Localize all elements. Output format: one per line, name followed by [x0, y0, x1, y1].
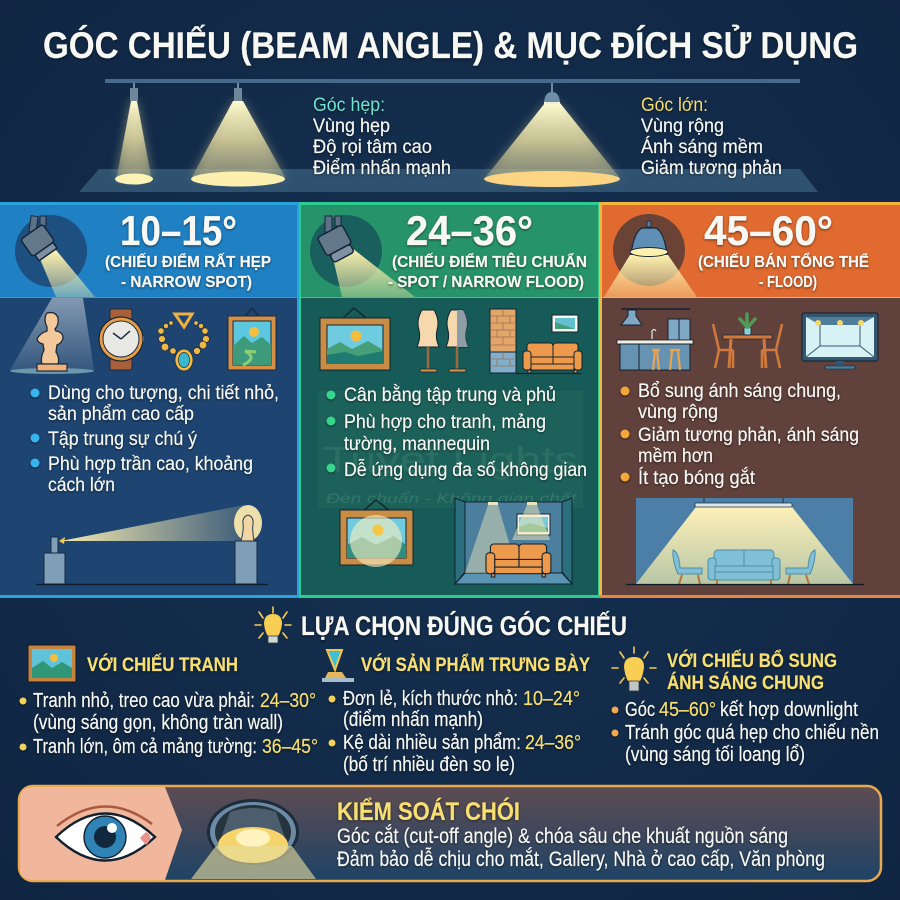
icon: display monitor — [802, 313, 878, 369]
list — [328, 688, 581, 776]
heading: 45–60: - FLOOD) — [759, 274, 817, 291]
heading: 24–36 — [388, 207, 587, 291]
icon: spotlight — [310, 215, 415, 297]
icon: necklace — [158, 314, 210, 371]
text: narrow angle — [313, 94, 451, 179]
heading: 10–15: (CHIẾU ĐIỂM RẤT HẸP — [105, 252, 271, 271]
list: Kệ dài nhiều sản phẩm: — [343, 732, 521, 754]
bullets: 45–60: Ít tạo bóng gắt — [638, 466, 756, 489]
heading: 24–36: 24–36° — [406, 207, 533, 254]
icon: wristwatch — [99, 309, 144, 370]
bullets: 45–60: mềm hơn — [638, 445, 713, 467]
text: glare control — [337, 796, 825, 871]
list: Đơn lẻ, kích thước nhỏ: — [343, 688, 518, 710]
bullets: 10–15: Dùng cho tượng, chi tiết nhỏ, — [48, 382, 279, 404]
heading: 10–15 — [105, 207, 271, 291]
list — [20, 690, 318, 758]
heading: 24–36: (CHIẾU ĐIỂM TIÊU CHUẨN — [392, 252, 587, 271]
subheading: VỚI SẢN PHẨM TRƯNG BÀY — [361, 654, 590, 676]
bullets: 45–60 — [620, 380, 859, 489]
icon: pendant lamp — [604, 214, 697, 297]
bullets: 45–60: vùng rộng — [638, 401, 718, 423]
text: narrow angle: Điểm nhấn mạnh — [313, 157, 451, 179]
text: glare control: Góc cắt (cut-off angle) & chóa sâu che khuất nguồn sáng — [337, 825, 788, 848]
wide flood lamp — [484, 83, 620, 187]
bullets: 24–36: Dễ ứng dụng đa số không gian — [344, 458, 587, 481]
text: glare control: KIỂM SOÁT CHÓI — [337, 796, 520, 826]
subheading: VỚI CHIẾU TRANH — [87, 654, 238, 676]
bullets: 10–15: cách lớn — [48, 474, 115, 496]
heading: 45–60: 45–60° — [704, 207, 833, 254]
column: painting lighting — [20, 645, 318, 758]
column: product display — [322, 650, 590, 776]
icon: picture with light pool — [340, 500, 413, 567]
watermark — [318, 391, 583, 508]
subheading — [667, 650, 837, 694]
list: (vùng sáng gọn, không tràn wall) — [33, 712, 283, 734]
bullets: 24–36: Cân bằng tập trung và phủ — [344, 383, 556, 406]
bullets: 24–36: tường, mannequin — [344, 433, 490, 455]
diagram: living room flood lighting — [626, 498, 864, 584]
text: wide angle: Góc lớn: — [641, 94, 708, 116]
text: narrow angle: Độ rọi tâm cao — [313, 136, 432, 158]
list: Tranh lớn, ôm cả mảng tường: — [33, 736, 257, 758]
heading: 10–15: 10–15° — [120, 207, 237, 254]
diagram: room with wall washers — [455, 498, 572, 584]
diagram: beam angle comparison — [79, 79, 818, 192]
watermark: Tuyet Lights — [323, 439, 578, 480]
subheading: VỚI CHIẾU BỔ SUNG — [667, 650, 837, 672]
list — [612, 699, 879, 766]
list: 24–30° — [260, 690, 316, 712]
list: 36–45° — [262, 736, 318, 758]
panel: 45–60 degrees — [599, 202, 900, 598]
text: narrow angle: Vùng hẹp — [313, 115, 390, 137]
icon: kitchen — [617, 309, 693, 370]
icon: framed painting — [320, 308, 390, 370]
text: wide angle: Giảm tương phản — [641, 157, 782, 179]
bullets: 10–15: sản phẩm cao cấp — [48, 403, 194, 425]
bullets: 45–60: Giảm tương phản, ánh sáng — [638, 424, 859, 446]
icon: mannequins — [417, 310, 468, 372]
panel: 10–15 degrees — [0, 202, 300, 598]
list: (bố trí nhiều đèn so le) — [343, 754, 515, 776]
list: kết hợp downlight — [720, 699, 858, 721]
list: Tranh nhỏ, treo cao vừa phải: — [33, 690, 255, 712]
diagram: long throw spotlight — [36, 505, 268, 584]
bullets: 10–15 — [30, 382, 279, 496]
watermark: Đèn chuẩn - Không gian chất — [326, 490, 578, 506]
list: 45–60° — [659, 699, 716, 721]
icon: framed picture — [228, 308, 276, 370]
text: narrow angle: Góc hẹp: — [313, 94, 385, 116]
heading: choose the right angle: LỰA CHỌN ĐÚNG GÓC CHIẾU — [301, 610, 627, 641]
text: wide angle — [641, 94, 782, 179]
bullets: 10–15: Tập trung sự chú ý — [48, 428, 197, 450]
icon: dining set — [713, 314, 782, 368]
medium spot lamp — [191, 83, 285, 186]
heading: 45–60 — [698, 207, 869, 291]
bullets: 24–36 — [326, 383, 587, 481]
list: 24–36° — [525, 732, 581, 754]
bullets: 45–60: Bổ sung ánh sáng chung, — [638, 380, 841, 402]
heading: 45–60: (CHIẾU BÁN TỔNG THỂ — [698, 252, 869, 271]
list: Góc — [625, 699, 655, 721]
bullets: 10–15: Phù hợp trần cao, khoảng — [48, 453, 253, 475]
icon: spotlight — [15, 215, 95, 297]
icon: recessed downlight — [191, 799, 316, 879]
heading: 10–15: - NARROW SPOT) — [121, 274, 252, 291]
icon: brick wall with sofa — [490, 309, 582, 374]
column: general light — [612, 647, 879, 766]
panel: glare control — [19, 786, 881, 881]
icon: heading light bulb — [255, 607, 291, 643]
floor plane — [79, 169, 818, 192]
subheading: ÁNH SÁNG CHUNG — [667, 672, 824, 694]
list: 10–24° — [523, 688, 580, 710]
text: wide angle: Vùng rộng — [641, 115, 724, 137]
icon: bulb — [612, 647, 656, 691]
icon: gem on stand — [322, 650, 354, 682]
heading: 24–36: - SPOT / NARROW FLOOD) — [388, 274, 584, 291]
icon: picture frame — [28, 645, 76, 682]
ceiling track — [105, 79, 800, 83]
icon: statue under light — [10, 298, 94, 374]
list: (điểm nhấn mạnh) — [343, 709, 483, 731]
text: wide angle: Ánh sáng mềm — [641, 135, 763, 158]
bullets: 24–36: Phù hợp cho tranh, mảng — [344, 411, 546, 433]
list: (vùng sáng tối loang lổ) — [625, 744, 805, 766]
narrow spot lamp — [115, 83, 153, 184]
icon: eye — [56, 806, 155, 860]
panel: 24–36 degrees — [299, 202, 600, 598]
text: glare control: Đảm bảo dễ chịu cho mắt, Gallery, Nhà ở cao cấp, Văn phòng — [337, 848, 825, 871]
